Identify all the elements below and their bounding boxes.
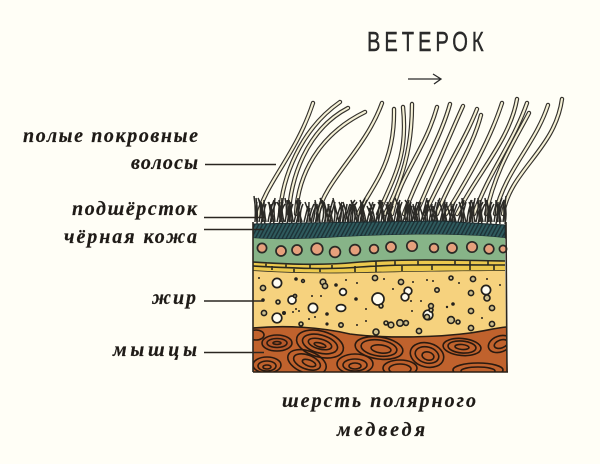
label: fat: [151, 287, 264, 309]
fat globules: [272, 278, 491, 323]
outline of the skin section: [253, 222, 507, 372]
label: undercoat: подшёрсток: [72, 198, 198, 220]
caption: шерсть полярного: [282, 390, 476, 412]
layer: green dermis with circles: [253, 234, 507, 265]
heading: wind: ВЕТЕРОК: [367, 27, 484, 58]
arrow: wind direction: [408, 74, 441, 84]
layer: muscle: [253, 326, 508, 373]
label: hollow guard hairs: волосы: [131, 152, 198, 174]
hollow guard hairs: [258, 99, 562, 216]
layer: yellow cells: [253, 260, 505, 273]
caption: медведя: [336, 419, 425, 441]
label: hollow guard hairs: [23, 125, 276, 174]
caption: [282, 390, 476, 441]
label: fat: жир: [151, 287, 196, 309]
layer: fat: [253, 271, 506, 337]
muscle fibres: [254, 329, 506, 372]
undercoat: [254, 196, 506, 224]
label: hollow guard hairs: полые покровные: [23, 125, 198, 147]
label: black skin: чёрная кожа: [64, 226, 197, 248]
label: muscles: мышцы: [112, 339, 197, 361]
layer: black skin: [253, 221, 505, 239]
